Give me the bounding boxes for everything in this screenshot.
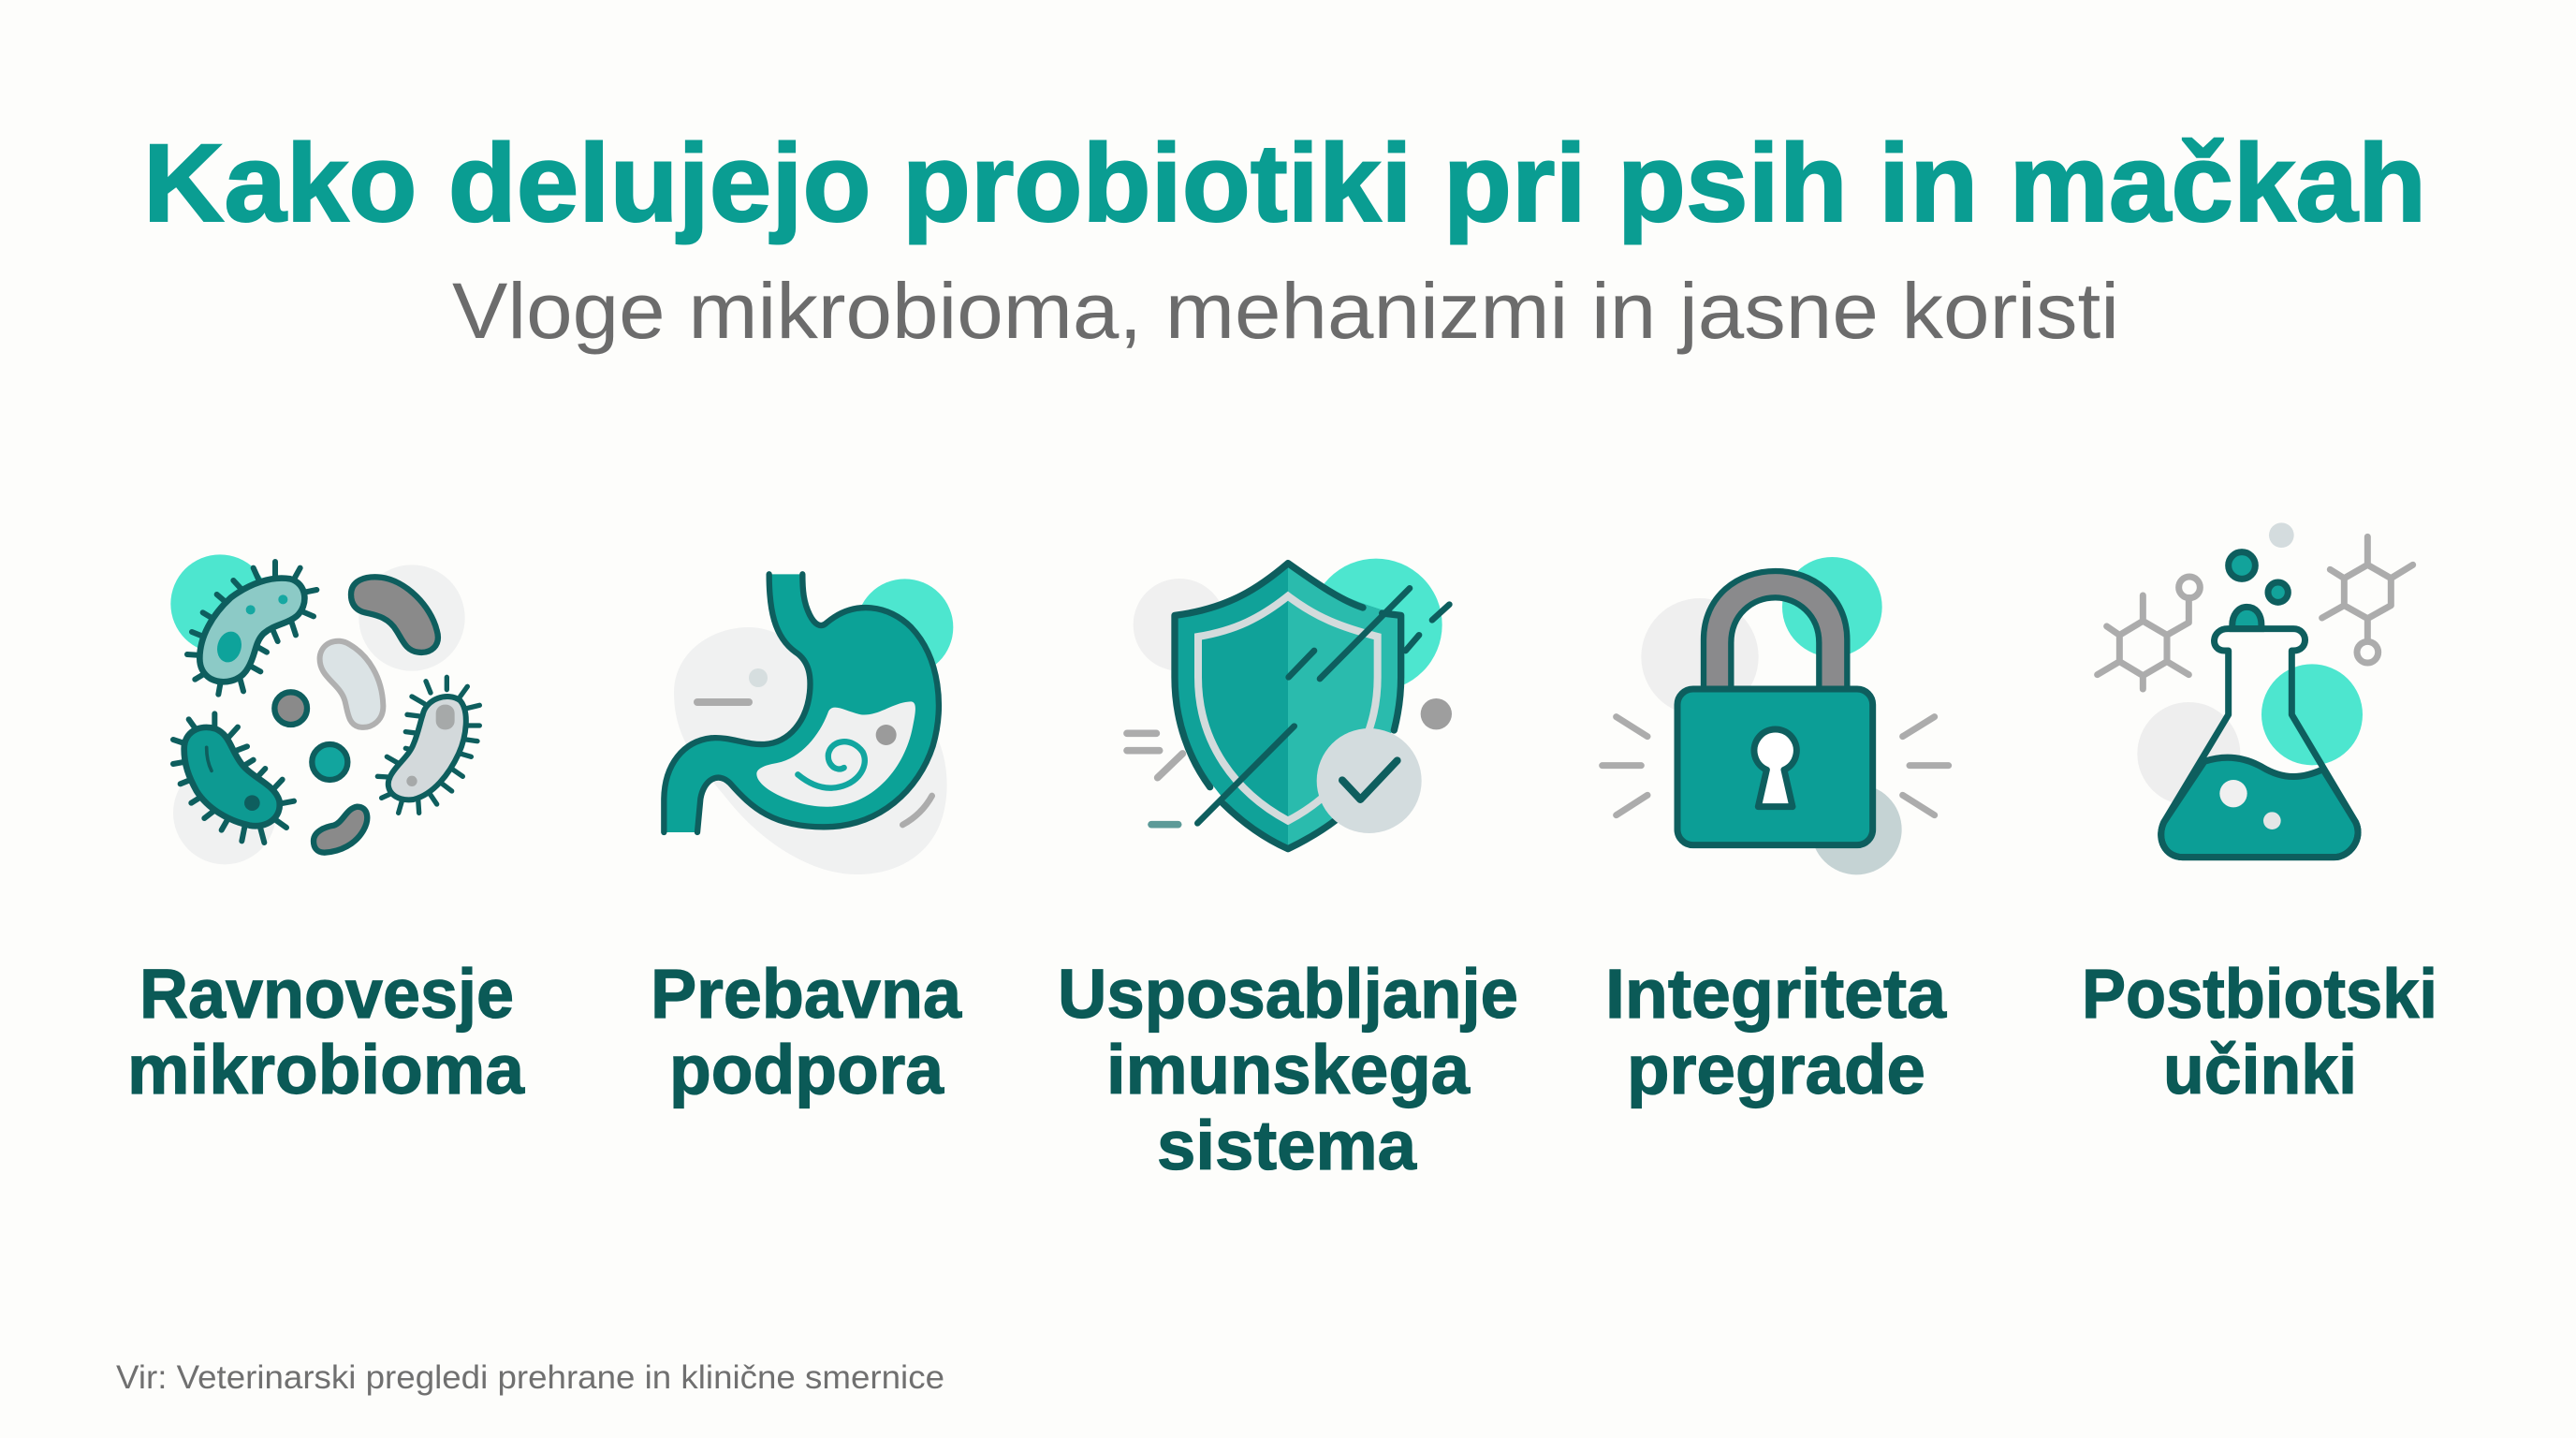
label: Postbiotski učinki [2082,955,2437,1108]
icon: shield [1127,559,1452,849]
label: Usposabljanje imunskega sistema: imunskega [1106,1031,1471,1108]
panel: immune training [1058,559,1518,1184]
label: Integriteta pregrade: Integriteta [1605,955,1947,1033]
icon: stomach [664,574,953,874]
label: Integriteta pregrade: pregrade [1627,1031,1925,1108]
panel: microbiome balance [127,554,525,1108]
label: Usposabljanje imunskega sistema: Usposabljanje [1058,955,1518,1033]
panel: digestive support [651,574,962,1108]
label: Prebavna podpora: podpora [669,1031,944,1108]
icon: flask [2098,522,2413,858]
panel: barrier integrity [1603,557,1949,1108]
label: Prebavna podpora [651,955,962,1108]
label: Usposabljanje imunskega sistema: sistema [1157,1107,1417,1184]
icon: padlock [1603,557,1949,874]
icon: bacteria [170,554,479,864]
label: Usposabljanje imunskega sistema [1058,955,1518,1184]
label: Ravnovesje mikrobioma [127,955,525,1108]
label: Postbiotski učinki: Postbiotski [2082,955,2437,1033]
title: Kako delujejo probiotiki pri psih in mačkah [143,122,2426,245]
label: Postbiotski učinki: učinki [2163,1031,2357,1108]
label: Prebavna podpora: Prebavna [651,955,962,1033]
subtitle: Vloge mikrobioma, mehanizmi in jasne koristi [452,267,2119,355]
panel: postbiotic effects [2082,522,2437,1108]
source footnote: Vir: Veterinarski pregledi prehrane in klinične smernice [116,1359,944,1396]
label: Ravnovesje mikrobioma: Ravnovesje [139,955,514,1033]
label: Integriteta pregrade [1605,955,1947,1108]
label: Ravnovesje mikrobioma: mikrobioma [127,1031,525,1108]
